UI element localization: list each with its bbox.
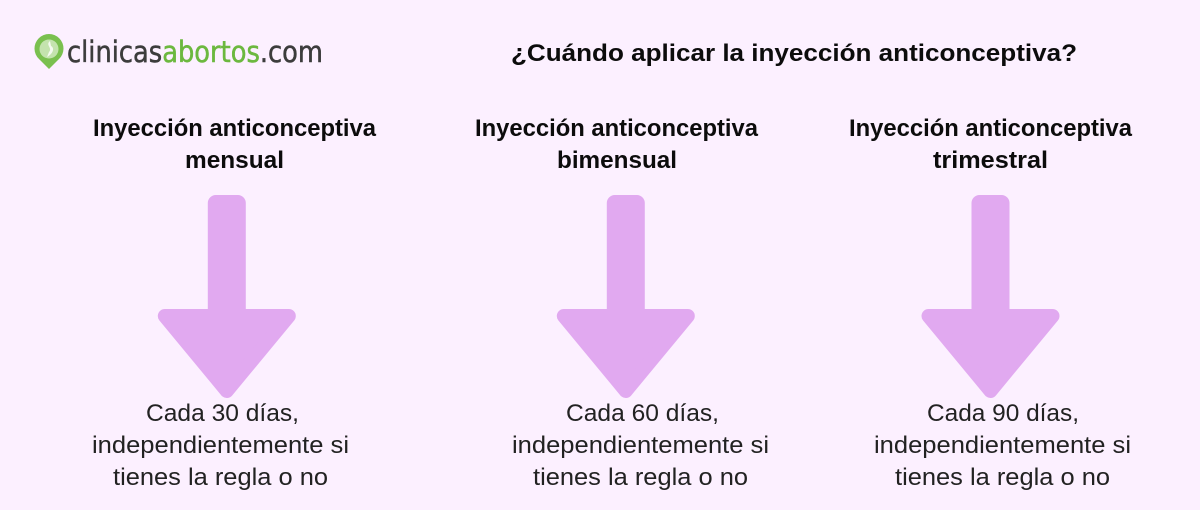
text block: bimensual: Cada 60 días,: [566, 400, 719, 427]
heading: mensual: Inyección anticonceptiva: [93, 115, 377, 142]
logo: clinicasabortos.com: [34, 34, 323, 69]
text block: mensual: [92, 400, 349, 491]
text block: mensual: independientemente si: [92, 432, 349, 459]
text block: trimestral: tienes la regla o no: [895, 464, 1110, 491]
heading: trimestral: [849, 115, 1133, 174]
text block: trimestral: independientemente si: [874, 432, 1131, 459]
text block: mensual: Cada 30 días,: [146, 400, 299, 427]
heading: bimensual: Inyección anticonceptiva: [475, 115, 759, 142]
heading: trimestral: Inyección anticonceptiva: [849, 115, 1133, 142]
column: trimestral: [849, 115, 1133, 491]
title: ¿Cuándo aplicar la inyección anticonceptiva?: [511, 40, 1077, 67]
column: bimensual: [475, 115, 769, 491]
text block: trimestral: [874, 400, 1131, 491]
text block: trimestral: Cada 90 días,: [927, 400, 1079, 427]
heading: mensual: [93, 115, 377, 174]
heading: bimensual: [475, 115, 759, 174]
text block: bimensual: tienes la regla o no: [533, 464, 748, 491]
arrow: mensual: [165, 195, 289, 391]
text block: bimensual: [512, 400, 769, 491]
text block: bimensual: independientemente si: [512, 432, 769, 459]
icon: green location pin: [34, 34, 64, 69]
heading: mensual: mensual: [185, 147, 284, 174]
text block: mensual: tienes la regla o no: [113, 464, 328, 491]
logo wordmark: clinicasabortos.com: [67, 35, 323, 69]
heading: trimestral: trimestral: [933, 147, 1048, 174]
arrow: trimestral: [928, 195, 1052, 391]
arrow: bimensual: [564, 195, 688, 391]
column: mensual: [92, 115, 377, 491]
heading: bimensual: bimensual: [557, 147, 677, 174]
